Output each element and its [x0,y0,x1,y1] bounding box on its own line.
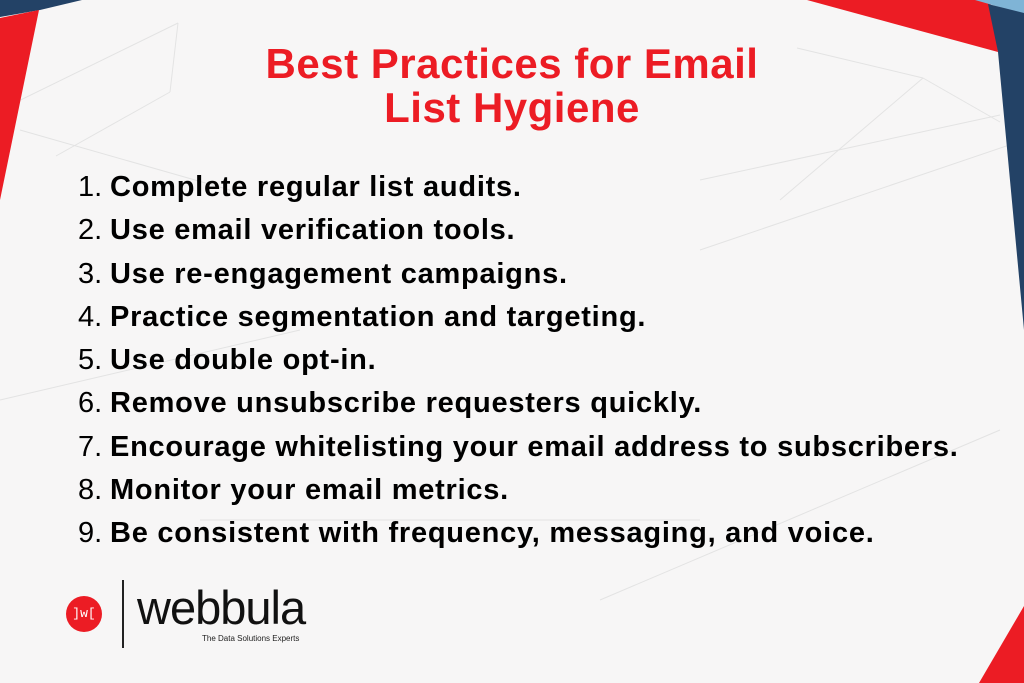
list of practices: 2. [78,214,102,246]
title: List Hygiene [384,84,640,131]
list of practices: Use email verification tools. [110,214,515,246]
list of practices: Remove unsubscribe requesters quickly. [110,387,702,419]
logo: webbula: The Data Solutions Experts [202,634,299,643]
list of practices: 1. [78,171,102,203]
list of practices: Be consistent with frequency, messaging, and voice. [110,517,875,549]
wordmark: webbula [137,581,305,634]
list of practices: Encourage whitelisting your email address to subscribers. [110,431,959,463]
icon: logo circle [66,596,102,632]
icon: logo circle: ]w[ [72,606,96,621]
list of practices: 9. [78,517,102,549]
title [266,40,758,131]
list of practices [78,171,959,549]
list of practices: Practice segmentation and targeting. [110,301,646,333]
list of practices: 5. [78,344,102,376]
list of practices: Use double opt-in. [110,344,376,376]
list of practices: Use re-engagement campaigns. [110,258,568,290]
logo: webbula [66,580,306,648]
list of practices: 7. [78,431,102,463]
list of practices: 8. [78,474,102,506]
list of practices: 6. [78,387,102,419]
title: Best Practices for Email [266,40,758,87]
list of practices: 4. [78,301,102,333]
list of practices: Complete regular list audits. [110,171,522,203]
list of practices: 3. [78,258,102,290]
list of practices: Monitor your email metrics. [110,474,509,506]
